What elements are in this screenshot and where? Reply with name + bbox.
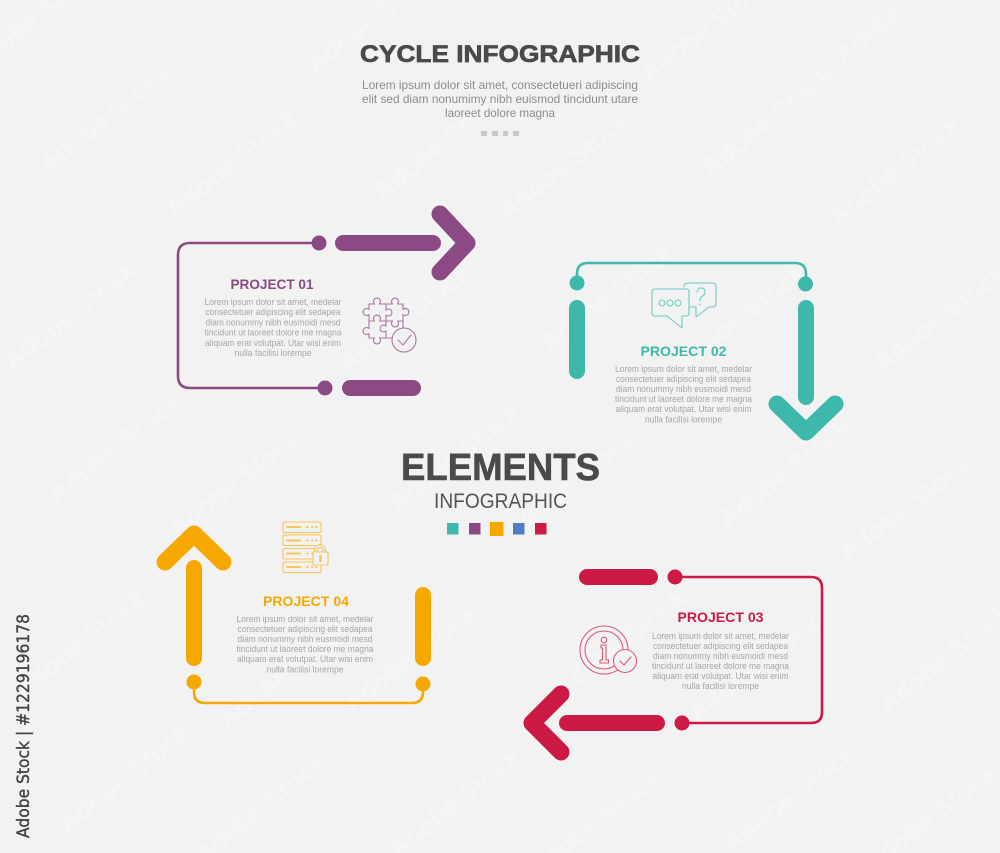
- stock id side label: Adobe Stock | #1229196178: [14, 614, 34, 838]
- red top bar: [587, 569, 650, 585]
- watermark pattern: Adobe Stock: [383, 397, 527, 519]
- text block: project 04: Lorem ipsum dolor sit amet, medelar: [236, 614, 374, 624]
- watermark pattern: Adobe Stock: [696, 60, 840, 182]
- purple bottom bar: [350, 380, 413, 396]
- text block: project 02: consectetuer adipiscing elit sedapea: [616, 374, 751, 384]
- subtitle text block: laoreet dolore magna: [445, 106, 555, 120]
- yellow frame connector: [186, 674, 430, 703]
- title dots: [481, 131, 519, 136]
- text block: project 01: [204, 297, 342, 358]
- watermark pattern: Adobe Stock: [498, 422, 642, 544]
- watermark pattern: Adobe Stock: [713, 412, 857, 534]
- watermark pattern: Adobe Stock: [338, 597, 482, 719]
- purple arrow: [343, 214, 467, 272]
- panel: project 02: [570, 263, 835, 432]
- center heading: elements: ELEMENTS: [401, 447, 600, 489]
- text block: project 02: nulla facilisi lorempe: [645, 414, 722, 424]
- heading: project 02: PROJECT 02: [640, 343, 727, 359]
- teal arrow: [777, 308, 835, 432]
- watermark pattern: Adobe Stock: [833, 447, 977, 569]
- red frame connector: [668, 570, 822, 730]
- watermark pattern: Adobe Stock: [368, 84, 512, 206]
- watermark pattern: Adobe Stock: [160, 102, 304, 224]
- watermark pattern: Adobe Stock: [43, 387, 187, 509]
- text block: project 02: diam nonummy nibh eusmoidi mesd: [616, 384, 751, 394]
- teal frame connector: [570, 263, 813, 292]
- text block: project 01: Lorem ipsum dolor sit amet, medelar: [204, 297, 342, 307]
- watermark pattern: Adobe Stock: [548, 582, 692, 704]
- text block: project 03: Lorem ipsum dolor sit amet, medelar: [652, 631, 789, 641]
- text block: project 04: diam nonummy nibh eusmoidi mesd: [238, 634, 372, 644]
- panel: project 01: [178, 214, 467, 396]
- watermark pattern: Adobe Stock: [53, 717, 197, 839]
- icon: server with lock: [283, 522, 328, 572]
- watermark pattern: Adobe Stock: [213, 612, 357, 734]
- watermark pattern: Adobe Stock: [823, 110, 967, 232]
- subtitle text block: elit sed diam nonumimy nibh euismod tincidunt utare: [362, 92, 638, 106]
- teal left bar: [569, 308, 585, 371]
- text block: project 03: aliquam erat volutpat. Utar wisi enim: [652, 671, 788, 681]
- yellow right bar: [415, 595, 431, 658]
- text block: project 01: aliquam erat volutpat. Utar wisi enim: [205, 338, 341, 348]
- heading: project 03: PROJECT 03: [678, 609, 764, 625]
- watermark pattern: Adobe Stock: [493, 104, 637, 226]
- subtitle text block: [362, 78, 638, 120]
- text block: project 03: consectetuer adipiscing elit sedapea: [653, 641, 788, 651]
- text block: project 04: tincidunt ut laoreet dolore me magna: [236, 644, 374, 654]
- text block: project 01: consectetuer adipiscing elit sedapea: [206, 307, 340, 317]
- watermark pattern: Adobe Stock: [8, 582, 152, 704]
- text block: project 03: tincidunt ut laoreet dolore me magna: [652, 661, 789, 671]
- text block: project 02: [615, 364, 752, 424]
- text block: project 04: [236, 614, 374, 674]
- text block: project 02: Lorem ipsum dolor sit amet, medelar: [615, 364, 752, 374]
- panel: project 03: [532, 570, 822, 752]
- icon: puzzle with check: [363, 298, 416, 352]
- subtitle text block: Lorem ipsum dolor sit amet, consectetueri adipiscing: [362, 78, 638, 92]
- panel: project 04: [165, 522, 430, 703]
- watermark pattern: Adobe Stock: [163, 422, 307, 544]
- text block: project 02: aliquam erat volutpat. Utar wisi enim: [616, 404, 752, 414]
- text block: project 03: [652, 631, 789, 691]
- title: CYCLE INFOGRAPHIC: [360, 41, 640, 68]
- watermark pattern: Adobe Stock: [535, 237, 679, 359]
- watermark pattern: Adobe Stock: [0, 254, 142, 376]
- center subheading: infographic: INFOGRAPHIC: [434, 490, 567, 513]
- icon: speech bubbles: [652, 283, 716, 328]
- text block: project 01: nulla facilisi lorempe: [234, 348, 312, 358]
- icon: info with check: [580, 626, 636, 674]
- watermark pattern: Adobe Stock: [333, 257, 477, 379]
- text block: project 01: diam nonummy nibh eusmoidi mesd: [206, 318, 340, 328]
- text block: project 01: tincidunt ut laoreet dolore me magna: [204, 328, 342, 338]
- watermark pattern: Adobe Stock: [33, 57, 177, 179]
- heading: project 01: PROJECT 01: [230, 276, 314, 292]
- text block: project 04: nulla facilisi lorempe: [266, 664, 344, 674]
- text block: project 04: aliquam erat volutpat. Utar wisi enim: [237, 654, 373, 664]
- text block: project 04: consectetuer adipiscing elit sedapea: [238, 624, 372, 634]
- red arrow: [532, 694, 657, 752]
- purple frame connector: [178, 236, 332, 396]
- yellow arrow: [165, 534, 223, 658]
- text block: project 02: tincidunt ut laoreet dolore me magna: [615, 394, 752, 404]
- watermark pattern: Adobe Stock: [668, 257, 812, 379]
- center colour legend squares: [447, 522, 546, 536]
- text block: project 03: nulla facilisi lorempe: [682, 681, 759, 691]
- watermark pattern: Adobe Stock: [683, 607, 827, 729]
- text block: project 03: diam nonummy nibh eusmoidi mesd: [653, 651, 788, 661]
- heading: project 04: PROJECT 04: [263, 593, 349, 609]
